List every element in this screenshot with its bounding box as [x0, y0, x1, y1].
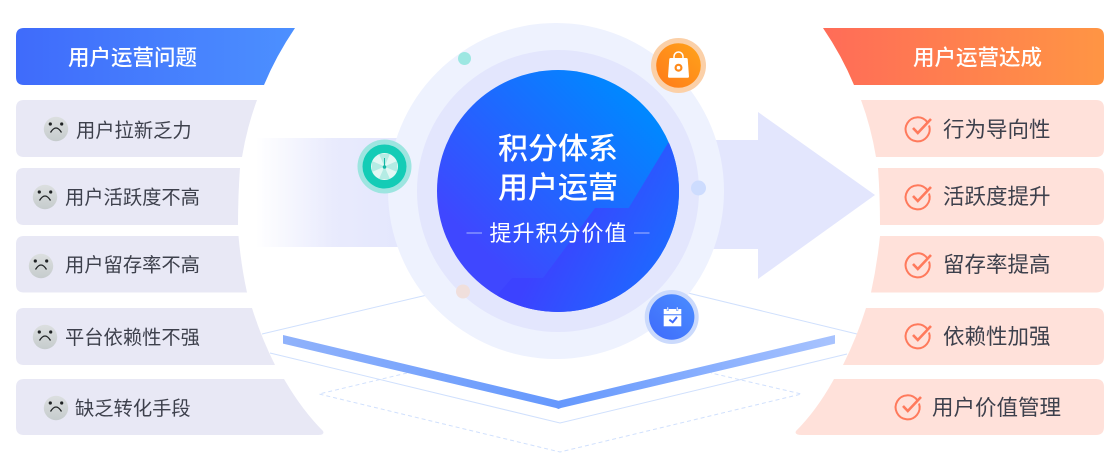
icon: shopping bag: [651, 38, 706, 93]
platform outline lines: [262, 293, 857, 452]
dot: peach: [456, 284, 470, 298]
center tagline: 提升积分价值: [489, 221, 628, 246]
result row 4: [843, 308, 1104, 365]
result row 1: [861, 100, 1104, 157]
base bar chevron: [283, 335, 835, 409]
icon: lucky wheel: [358, 140, 412, 194]
heading: results: [823, 28, 1104, 85]
problem row 1: [16, 100, 257, 157]
problem row 3: 用户留存率不高: [65, 254, 200, 276]
panel: user operation problems: [16, 28, 323, 435]
problem row 3: [16, 236, 247, 292]
center title: 积分体系: [498, 133, 618, 166]
central circle: [388, 23, 724, 359]
problem row 2: [16, 168, 240, 225]
problem row 5: 缺乏转化手段: [75, 398, 191, 420]
arrow: flow from problems to results: [239, 112, 875, 279]
dot: teal: [458, 52, 471, 65]
result row 3: 留存率提高: [943, 253, 1051, 277]
heading: problems: [16, 28, 295, 85]
result row 1: 行为导向性: [943, 118, 1051, 142]
problem row 4: 平台依赖性不强: [65, 327, 200, 349]
problem row 2: 用户活跃度不高: [65, 187, 200, 209]
result row 2: [878, 168, 1104, 225]
result row 2: 活跃度提升: [943, 185, 1051, 209]
result row 5: 用户价值管理: [932, 396, 1061, 420]
panel: user operation results: [796, 28, 1104, 435]
heading: problems: 用户运营问题: [68, 46, 197, 70]
heading: results: 用户运营达成: [913, 46, 1042, 70]
dot: blue: [691, 180, 706, 196]
problem row 5: [16, 379, 323, 435]
problem row 4: [16, 308, 275, 365]
center subtitle: 用户运营: [498, 172, 618, 205]
problem row 1: 用户拉新乏力: [76, 120, 192, 142]
result row 5: [796, 379, 1104, 435]
result row 4: 依赖性加强: [943, 325, 1051, 349]
result row 3: [871, 236, 1104, 292]
icon: calendar: [645, 290, 699, 344]
